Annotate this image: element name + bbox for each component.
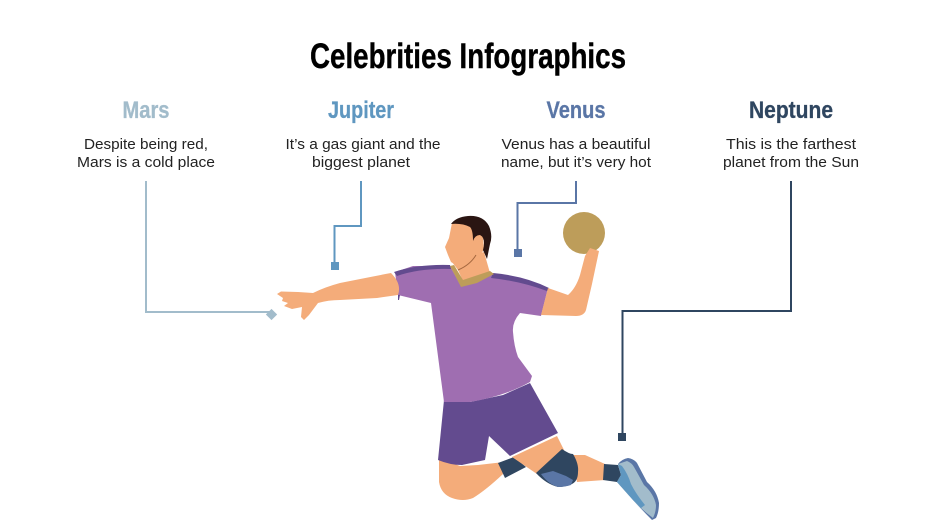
connector: Neptune <box>618 181 791 441</box>
rear sock <box>498 457 526 478</box>
shirt <box>395 266 548 402</box>
column: Venus <box>501 97 652 257</box>
sock <box>603 464 621 482</box>
neck crease <box>458 255 476 270</box>
hair <box>451 216 491 259</box>
left arm <box>277 273 399 320</box>
text: Venus description: name, but it’s very hot <box>501 154 652 171</box>
column: Neptune <box>618 97 859 441</box>
neck <box>452 252 490 281</box>
column: Jupiter <box>286 97 440 270</box>
text: Mars description: Mars is a cold place <box>77 154 215 171</box>
heading: Venus: Venus <box>546 97 606 124</box>
text: Venus description: Venus has a beautiful <box>502 136 650 153</box>
title: Celebrities Infographics <box>310 37 626 76</box>
heading: Mars: Mars <box>122 97 170 124</box>
connector: Mars <box>146 181 277 320</box>
shorts <box>438 383 558 465</box>
connector: Venus <box>514 181 576 257</box>
heading: Neptune: Neptune <box>749 97 833 124</box>
collar <box>450 265 494 287</box>
ball <box>563 212 605 254</box>
column: Mars <box>77 97 277 320</box>
knee pad <box>536 449 578 487</box>
shoe <box>617 458 659 520</box>
text: Neptune description: planet from the Sun <box>723 154 859 171</box>
text: Jupiter description: It’s a gas giant and the <box>286 136 440 153</box>
text: Neptune description: This is the farthest <box>726 136 857 153</box>
shin <box>512 436 564 474</box>
heading: Jupiter: Jupiter <box>328 97 394 124</box>
lower leg <box>572 455 605 482</box>
face <box>445 220 484 266</box>
connector: Jupiter <box>331 181 361 270</box>
right arm <box>541 248 599 316</box>
rear leg <box>439 458 504 500</box>
figure: handball player <box>277 212 659 520</box>
shirt shoulder bands <box>394 265 549 300</box>
text: Mars description: Despite being red, <box>84 136 208 153</box>
text: Jupiter description: biggest planet <box>312 154 411 171</box>
